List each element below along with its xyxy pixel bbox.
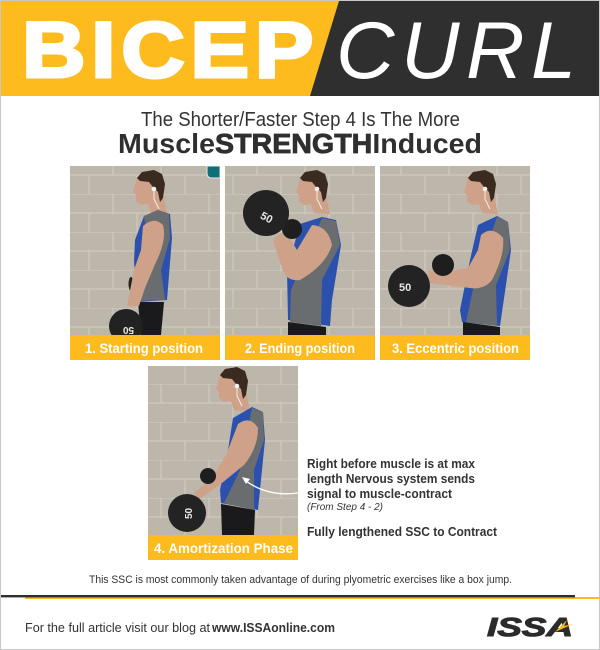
explanation text: (From Step 4 - 2) <box>307 502 383 513</box>
figure arm <box>194 420 258 500</box>
logo: ISSA: ISSA <box>487 612 573 642</box>
figure arm <box>127 221 164 306</box>
panel: step 4 amortization phase <box>148 366 298 535</box>
arrow <box>242 477 298 494</box>
figure torso <box>134 210 172 302</box>
caption: step 3 <box>380 335 530 360</box>
panel: step 3 eccentric position <box>380 166 530 335</box>
figure torso <box>460 216 511 326</box>
caption: step 1: 1. Starting position <box>85 340 203 356</box>
dumbbell label: 50 <box>184 507 195 519</box>
explanation text: signal to muscle-contract <box>307 487 453 501</box>
dumbbell <box>109 309 143 343</box>
caption: step 4: 4. Amortization Phase <box>154 540 293 556</box>
heading: MuscleSTRENGTHInduced <box>118 128 482 159</box>
banner title: BICEP: BICEP <box>22 5 319 94</box>
subtitle: The Shorter/Faster Step 4 Is The More <box>141 109 460 131</box>
explanation text: length Nervous system sends <box>307 472 475 486</box>
teal corner <box>207 166 220 178</box>
footer divider <box>1 595 600 599</box>
caption: step 2: 2. Ending position <box>245 340 355 356</box>
caption: step 2 <box>225 335 375 360</box>
explanation text <box>307 457 498 539</box>
footer text: For the full article visit our blog at <box>25 620 210 635</box>
caption: step 3: 3. Eccentric position <box>392 340 519 356</box>
figure torso <box>220 407 265 510</box>
banner title: CURL: CURL <box>336 6 576 96</box>
dumbbell <box>282 219 302 239</box>
panel: step 1 starting position <box>70 166 220 343</box>
explanation text: Fully lengthened SSC to Contract <box>307 525 498 539</box>
dumbbell <box>432 254 454 276</box>
dumbbell <box>200 468 216 484</box>
caption: step 1 <box>70 335 220 360</box>
panel: step 2 ending position <box>225 166 375 335</box>
dumbbell: 50 <box>122 324 134 335</box>
note: This SSC is most commonly taken advantage of during plyometric exercises like a box jump. <box>89 574 512 586</box>
banner <box>1 1 599 96</box>
footer text <box>25 620 335 635</box>
footer text: www.ISSAonline.com <box>211 620 335 635</box>
dumbbell label: 50 <box>399 282 411 294</box>
figure arm <box>273 225 332 280</box>
caption: step 4 <box>148 535 298 560</box>
explanation text: Right before muscle is at max <box>307 457 475 471</box>
figure torso <box>287 217 341 326</box>
dumbbell label: 50 <box>258 210 275 226</box>
figure arm <box>428 231 503 288</box>
